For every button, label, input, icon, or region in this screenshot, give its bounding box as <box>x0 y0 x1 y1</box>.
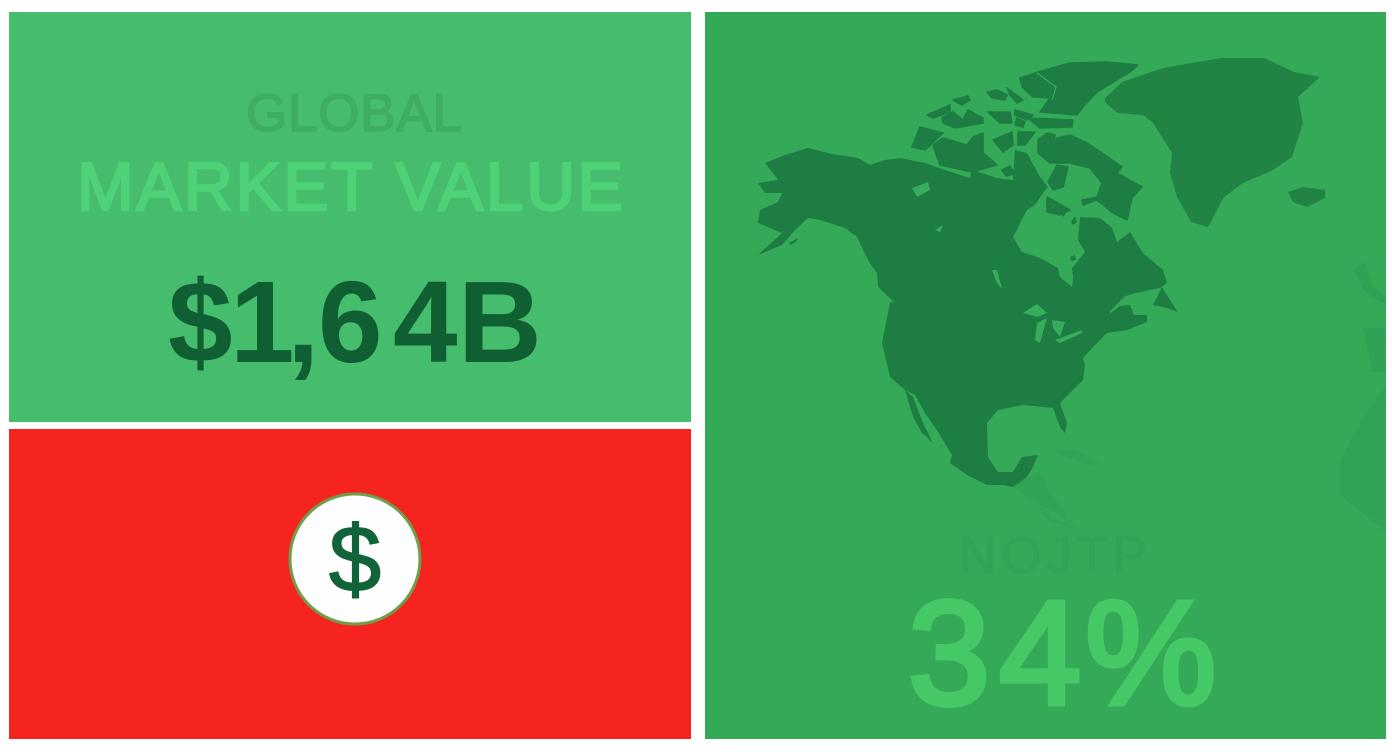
map: arctic islands <box>912 62 1142 220</box>
icon: dollar coin: $ <box>329 506 381 611</box>
heading: market value: MARKET VALUE <box>77 149 623 225</box>
panel: north america share <box>705 12 1386 739</box>
value: regional share: 34% <box>908 571 1217 736</box>
icon: dollar coin <box>290 494 420 624</box>
value: market value amount: $1,64B <box>168 257 542 387</box>
map: faint neighbouring continents <box>1340 262 1386 532</box>
label: faint region name: NOJTP <box>959 527 1147 585</box>
heading: global: GLOBAL <box>246 84 462 143</box>
map: north america <box>758 58 1325 487</box>
panel: global market value <box>9 12 691 422</box>
map: faint caribbean and central america <box>1013 450 1100 522</box>
panel: red icon panel <box>9 429 691 739</box>
